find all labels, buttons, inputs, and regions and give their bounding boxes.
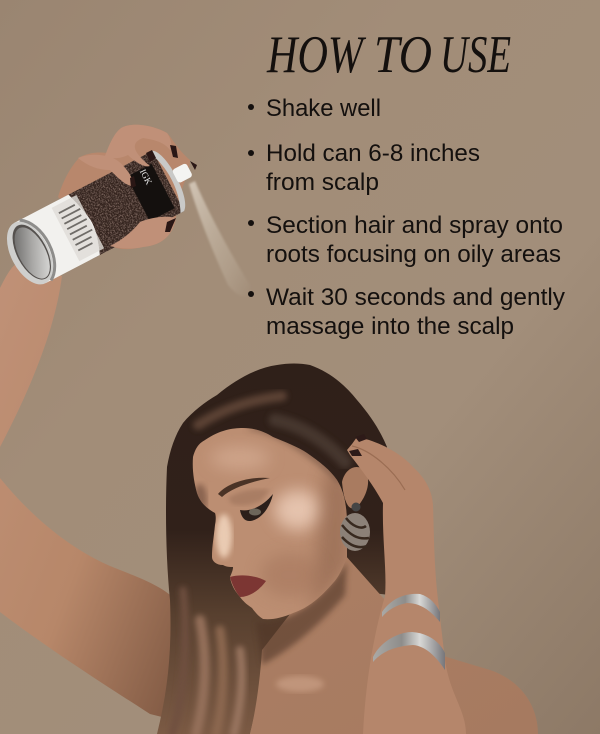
earring <box>340 502 370 551</box>
eye shadow <box>228 489 270 505</box>
chest highlight <box>276 676 324 692</box>
black panel <box>127 164 175 221</box>
spray mist <box>189 181 250 296</box>
spray can: IGK <box>138 167 154 187</box>
can body <box>59 151 184 260</box>
hand gripping can (behind) <box>58 125 190 249</box>
eyebrow <box>218 478 270 497</box>
face <box>193 428 347 619</box>
ear <box>342 467 368 509</box>
neck and chest <box>250 555 538 734</box>
step 3 <box>248 212 563 268</box>
step 1: Shake well <box>266 95 381 122</box>
hair <box>157 364 390 734</box>
right forearm and hand <box>347 437 466 734</box>
nails on right hand <box>349 434 367 456</box>
nozzle <box>172 163 193 183</box>
step 4: massage into the scalp <box>266 313 514 340</box>
title: USE <box>440 26 511 84</box>
title: HOW <box>266 26 367 84</box>
title <box>266 26 511 84</box>
step 2: Hold can 6-8 inches <box>266 140 480 167</box>
step 4: Wait 30 seconds and gently <box>266 284 565 311</box>
hair highlights <box>172 396 345 734</box>
bracelets <box>382 594 440 622</box>
finger line <box>352 446 405 490</box>
step 3: roots focusing on oily areas <box>266 241 561 268</box>
spray can <box>0 140 205 292</box>
title: TO <box>374 26 432 84</box>
base <box>0 214 63 292</box>
instructions list <box>248 95 565 340</box>
white label <box>14 191 107 283</box>
left arm <box>0 263 176 720</box>
eye <box>240 494 273 521</box>
fingers over can <box>78 125 175 249</box>
photo: model with raised arm spraying <box>0 125 538 734</box>
step 2 <box>248 140 480 196</box>
top rim <box>149 147 192 213</box>
nails <box>130 145 197 232</box>
step 4 <box>248 284 565 340</box>
shadow under chin <box>256 562 347 665</box>
step 3: Section hair and spray onto <box>266 212 563 239</box>
step 2: from scalp <box>266 169 379 196</box>
lips <box>230 575 266 597</box>
face shading <box>195 428 347 604</box>
